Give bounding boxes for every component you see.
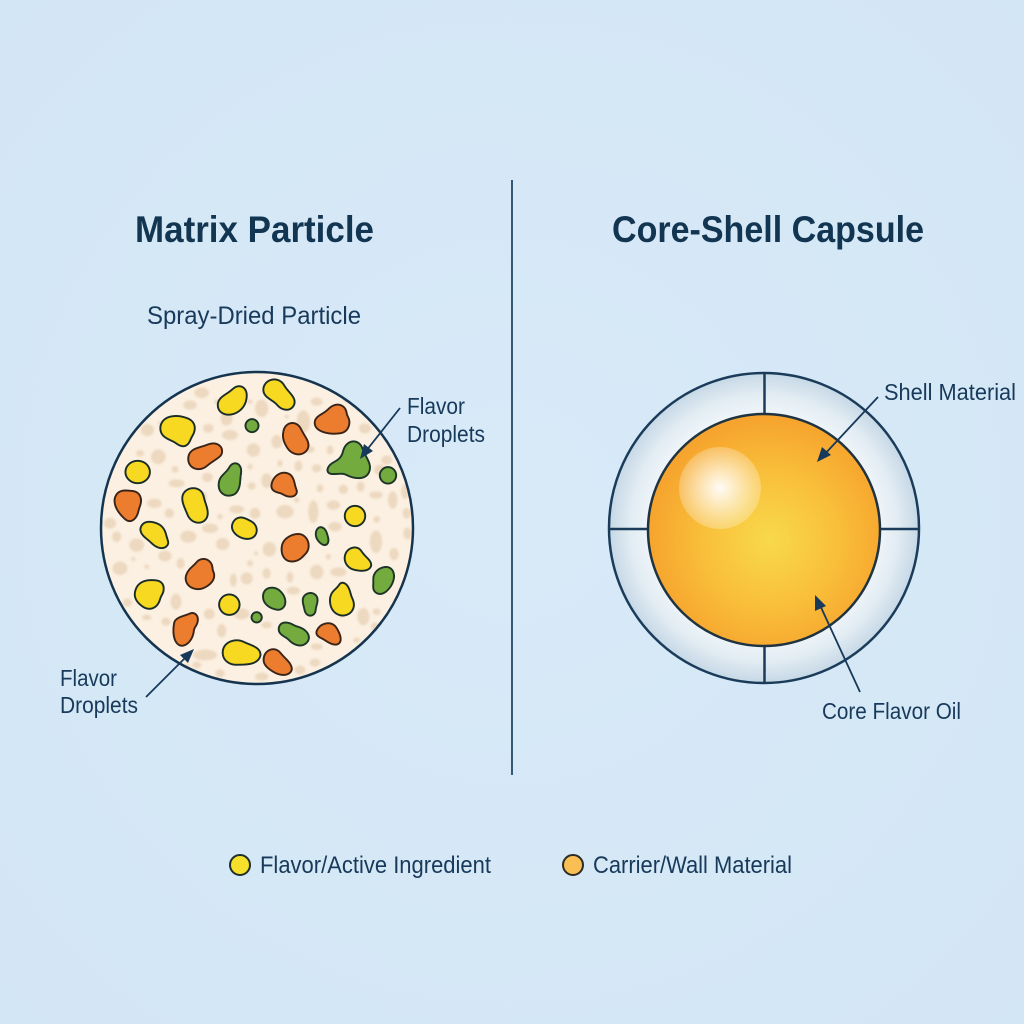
infographic canvas bbox=[62, 180, 1014, 878]
shell dividers bbox=[609, 373, 919, 683]
label: flavor droplets right: Droplets bbox=[407, 421, 485, 447]
droplets: orange flavor bbox=[115, 405, 349, 674]
subtitle: Spray-Dried Particle: Spray-Dried Particle bbox=[147, 302, 361, 330]
label: flavor droplets right: Flavor bbox=[407, 393, 465, 419]
label: flavor droplets left: Flavor bbox=[60, 665, 117, 691]
title: Matrix Particle: Matrix Particle bbox=[135, 209, 374, 250]
legend bbox=[230, 852, 792, 879]
label: flavor droplets left: Droplets bbox=[60, 692, 138, 718]
arrow: flavor droplets left bbox=[146, 649, 194, 697]
core highlight bbox=[679, 447, 761, 529]
divider bbox=[511, 180, 513, 775]
core bbox=[648, 414, 880, 646]
label: core flavor oil: Core Flavor Oil bbox=[822, 698, 961, 724]
diagram: matrix particle bbox=[101, 372, 413, 684]
diagram: core-shell capsule bbox=[609, 373, 919, 683]
arrow: flavor droplets right bbox=[360, 408, 400, 459]
matrix speckle texture bbox=[104, 387, 411, 681]
droplets: green flavor bbox=[219, 420, 396, 645]
legend marker: carrier bbox=[563, 855, 583, 875]
arrow: core flavor oil bbox=[815, 595, 860, 692]
droplets: yellow flavor bbox=[126, 380, 371, 664]
arrow: shell material bbox=[817, 397, 878, 462]
legend marker: flavor bbox=[230, 855, 250, 875]
legend label: carrier: Carrier/Wall Material bbox=[593, 852, 792, 879]
legend label: flavor: Flavor/Active Ingredient bbox=[260, 852, 491, 879]
title: Core-Shell Capsule: Core-Shell Capsule bbox=[612, 209, 924, 250]
particle outline bbox=[101, 372, 413, 684]
label: shell material: Shell Material bbox=[884, 379, 1016, 405]
shell bbox=[609, 373, 919, 683]
